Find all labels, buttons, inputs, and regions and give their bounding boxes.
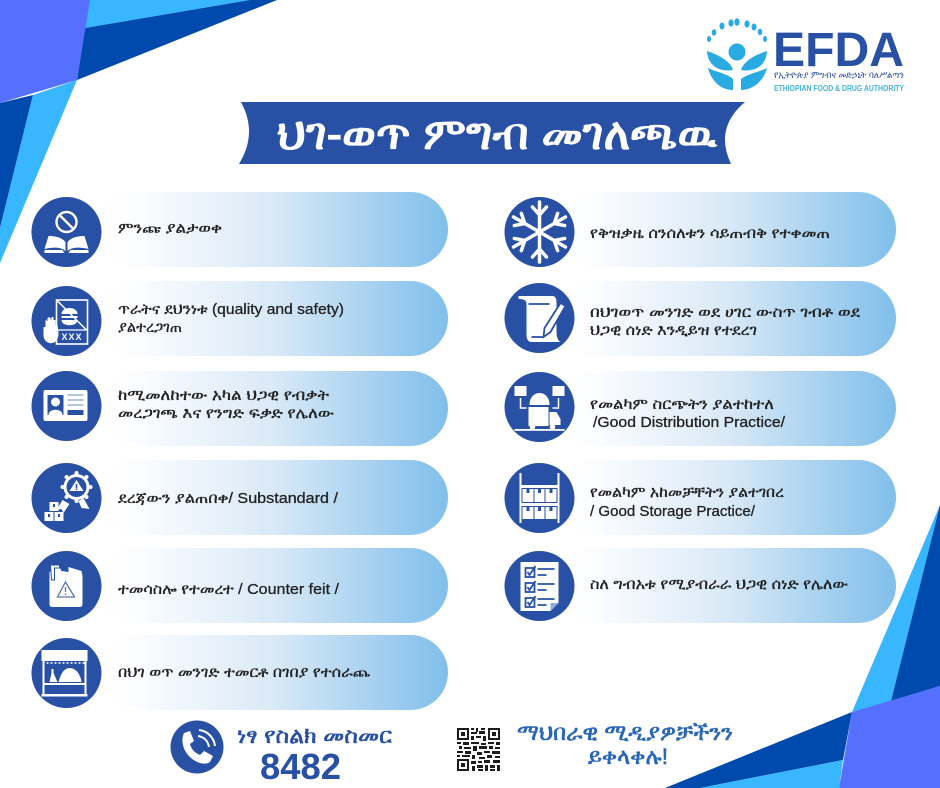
- text: [590, 304, 861, 339]
- logo emblem: [707, 18, 767, 90]
- text: ጥራትና ደህንነቱ (quality and safety): [118, 301, 344, 318]
- row: unknown source: [32, 192, 448, 267]
- text: የመልካም ስርጭትን ያልተከተለ: [590, 396, 774, 413]
- title: ህገ-ወጥ ምግብ መገለጫዉ: [277, 110, 717, 159]
- icon: market stall: [42, 650, 88, 696]
- text: / Good Storage Practice/: [590, 503, 756, 520]
- hotline number: 8482: [260, 746, 341, 787]
- icon: ID card: [44, 390, 88, 421]
- row: illegal entry with legal documents: [504, 281, 896, 356]
- icon: warehouse shelves: [520, 473, 560, 523]
- text: መረጋገጫ እና የንግድ ፍቃድ የሌለው: [118, 405, 335, 422]
- text: ያልተረጋገጠ: [118, 319, 182, 336]
- icon: jerrycan with warning: [50, 565, 82, 607]
- row: cold chain: [504, 192, 896, 267]
- row: no legal documentation: [504, 548, 896, 623]
- icon: delivery truck and boxes: [514, 386, 564, 431]
- icon: poster with burger and hand: [44, 300, 88, 344]
- text: ስለ ግብአቱ የሚያብራራ ህጋዊ ሰነድ የሌለው: [590, 576, 849, 593]
- text: ከሚመለከተው አካል ህጋዊ የብቃት: [118, 387, 329, 404]
- text: የቅዝቃዜ ሰንሰለቱን ሳይጠብቅ የተቀመጠ: [590, 225, 830, 242]
- row: counterfeit: [32, 548, 448, 623]
- text: [118, 387, 335, 422]
- decorative corner: top left: [0, 0, 277, 263]
- social media call to action: [517, 720, 733, 769]
- icon: checklist: [520, 562, 558, 611]
- text: ህጋዊ ሰነድ እንዲይዝ የተደረገ: [590, 322, 757, 339]
- text: በህገ ወጥ መንገድ ተመርቶ በገበያ የተሰራጨ: [118, 664, 370, 681]
- social media call to action: ማህበራዊ ሚዲያዎቻችንን: [517, 720, 733, 745]
- icon: document and pen: [518, 296, 566, 342]
- text: ምንጩ ያልታወቀ: [118, 220, 222, 237]
- icon: poster with burger and hand: XXX: [61, 332, 83, 342]
- row: quality and safety not verified: [32, 281, 448, 356]
- logo Amharic name: የኢትዮጵያ ምግብና መድኃኒት ባለሥልጣን: [774, 70, 904, 80]
- social media call to action: ይቀላቀሉ!: [588, 744, 668, 769]
- icon: banned book: [44, 212, 88, 253]
- text: /Good Distribution Practice/: [593, 414, 786, 431]
- title banner: [239, 102, 745, 164]
- hotline label: ነፃ የስልክ መስመር: [237, 723, 392, 748]
- QR code: [457, 728, 500, 771]
- row: substandard: [32, 460, 448, 535]
- text: የመልካም አከመቻቸትን ያልተገበረ: [590, 484, 785, 502]
- text: በህገወጥ መንገድ ወደ ሀገር ውስጥ ገብቶ ወደ: [590, 304, 861, 321]
- row: good storage practice: [504, 460, 896, 535]
- row: sold in the market: [32, 635, 448, 710]
- icon: phone: [170, 720, 224, 774]
- hotline: [170, 720, 392, 787]
- text: [590, 484, 785, 520]
- text: ተመሳስሎ የተመረተ / Counter feit /: [118, 581, 340, 598]
- logo English name: ETHIOPIAN FOOD & DRUG AUTHORITY: [774, 84, 905, 93]
- text: [590, 396, 786, 431]
- text: ደረጃውን ያልጠበቀ/ Substandard /: [118, 490, 339, 507]
- logo: EFDA: [707, 18, 905, 93]
- icon: warning badge and boxes: [44, 471, 92, 521]
- decorative corner: bottom right: [665, 505, 940, 788]
- icon: snowflake: [510, 202, 569, 262]
- logo wordmark: EFDA: [773, 24, 904, 77]
- text: [118, 301, 344, 336]
- row: no licence: [32, 371, 448, 446]
- row: good distribution practice: [504, 371, 896, 446]
